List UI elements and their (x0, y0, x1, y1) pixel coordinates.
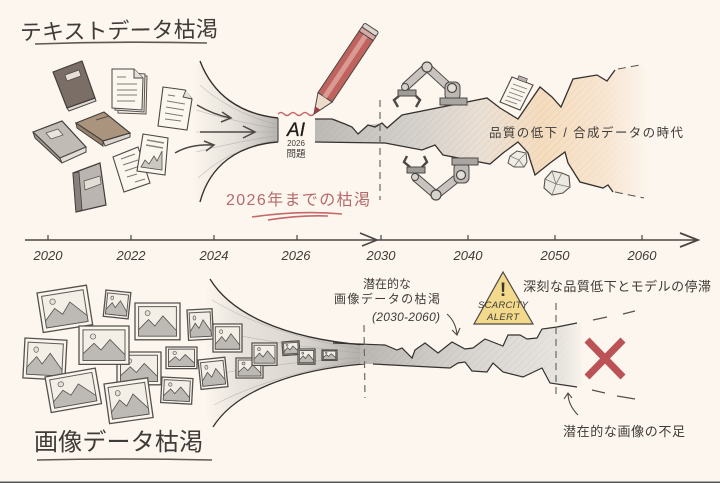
icon: document with chart (137, 134, 168, 175)
icon: document tilted (113, 147, 150, 192)
icon: pencil (307, 23, 379, 119)
icon: clipboard (500, 76, 533, 110)
caption: potential image data depletion: 潜在的な (363, 276, 411, 291)
timeline axis: 2050 (540, 248, 570, 263)
red caption: depletion by 2026: 2026年までの枯渇 (226, 191, 370, 209)
caption: potential image shortage: 潜在的な画像の不足 (563, 424, 685, 439)
label: AI 2026 problem: 2026 (287, 139, 305, 148)
dashed marker: 2030 upper (379, 100, 381, 200)
icon: book grey (33, 121, 86, 163)
timeline axis: 2030 (366, 248, 396, 263)
icon: robot arm upper (394, 62, 467, 107)
label: AI 2026 problem (286, 120, 306, 160)
funnel: text data (192, 61, 278, 202)
icon: scarcity alert triangle: ! (500, 280, 506, 301)
icon: stacked document (112, 69, 147, 114)
timeline axis: 2026 (281, 248, 311, 263)
timeline axis: 2022 (116, 248, 146, 263)
photo (298, 349, 315, 364)
trend band: text data quality (315, 65, 648, 198)
photo (45, 368, 101, 412)
label: AI 2026 problem: 問題 (286, 149, 306, 160)
photo (104, 378, 153, 424)
icon: crumpled paper large (544, 171, 570, 195)
photo (166, 347, 197, 369)
label: AI 2026 problem: AI (286, 120, 306, 141)
title: text data depletion: テキストデータ枯渇 (20, 17, 218, 45)
photo (252, 343, 277, 365)
caption: potential image data depletion: (2030-2060) (372, 310, 440, 324)
arrow: into funnel lower (175, 141, 214, 153)
photo (322, 350, 337, 360)
timeline axis: 2024 (199, 248, 228, 263)
bottom edge line (0, 482, 720, 483)
photo (103, 290, 131, 319)
icon: book dark (53, 61, 96, 111)
timeline axis: 2040 (453, 248, 483, 263)
photo (135, 303, 180, 340)
caption: potential image data depletion: 画像データの枯渇 (334, 291, 440, 306)
photo (236, 358, 263, 378)
icon: crumpled paper small (508, 151, 527, 167)
photo (161, 377, 193, 404)
icon: scarcity alert triangle: SCARCITY (478, 300, 529, 311)
caption: serious quality decline and model stagnation: 深刻な品質低下とモデルの停滞 (523, 279, 711, 294)
image cluster (23, 285, 337, 424)
photo (198, 357, 228, 389)
timeline axis: 2020 (33, 248, 63, 263)
caption: quality decline / synthetic data era: 品質の低下 / 合成データの時代 (489, 125, 683, 140)
photo (37, 285, 93, 333)
dashed marker: 2050 (555, 303, 557, 395)
arrow: into funnel upper (197, 105, 231, 122)
icon: book upright (73, 163, 106, 212)
timeline axis (25, 233, 698, 263)
photo (187, 309, 214, 340)
arrow: to shortage (564, 393, 578, 415)
photo (23, 338, 67, 380)
icon: scarcity alert triangle (474, 272, 533, 324)
icon: document (158, 87, 192, 130)
photo (213, 324, 242, 352)
photo (282, 341, 300, 356)
title: image data depletion: 画像データ枯渇 (34, 429, 203, 456)
photo (79, 326, 129, 364)
funnel: image data (205, 279, 364, 427)
red squiggle (278, 112, 314, 116)
dashed marker: 2030 lower (364, 325, 365, 398)
icon: red cross (587, 340, 623, 377)
icon: book brown (76, 112, 130, 146)
timeline axis: 2060 (627, 248, 657, 263)
icon: robot arm lower (404, 156, 478, 200)
photo (117, 352, 161, 385)
icon: scarcity alert triangle: ALERT (486, 312, 520, 323)
caption: potential image data depletion (334, 276, 440, 324)
arrow: to image band (447, 314, 460, 335)
red caption: depletion by 2026 (226, 191, 370, 220)
arrow: into funnel middle (200, 126, 255, 138)
trend band: image data quality (333, 311, 635, 399)
